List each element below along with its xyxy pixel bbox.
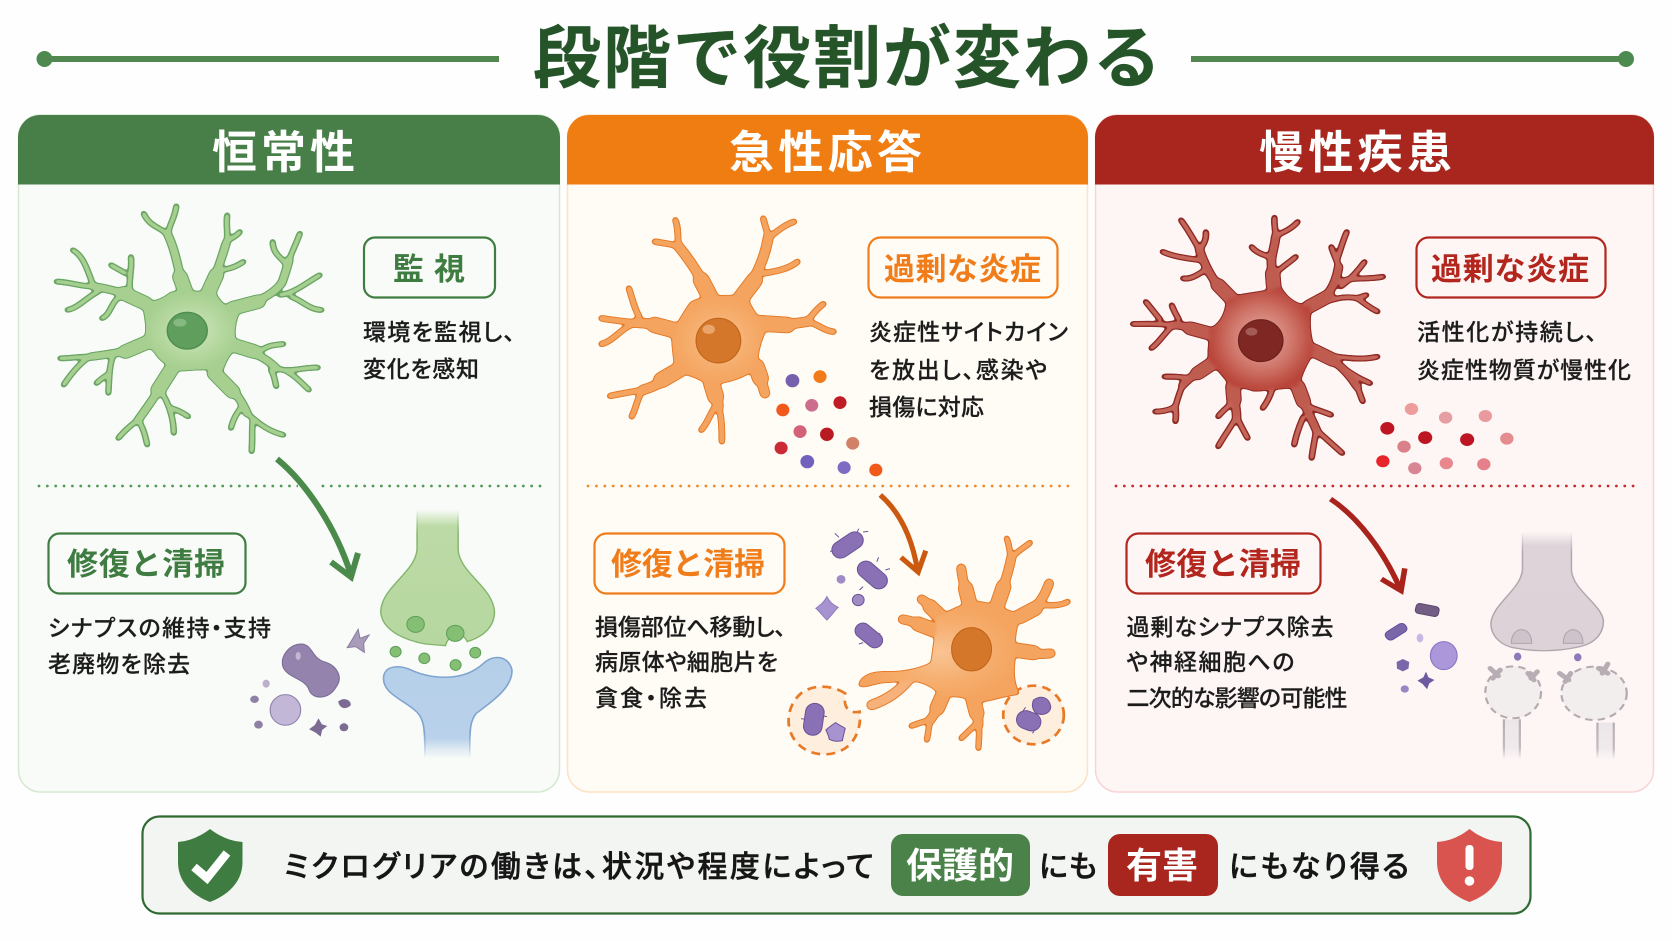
arrow bbox=[1331, 499, 1405, 591]
text: inflammation description: 炎症性サイトカイン bbox=[869, 319, 1068, 345]
text: にもなり得る: にもなり得る bbox=[1229, 851, 1409, 884]
panel: chronic disease bbox=[1095, 115, 1654, 792]
pill: 保護的 bbox=[891, 834, 1030, 896]
pathogens bbox=[816, 529, 891, 651]
title with side lines bbox=[36, 21, 1634, 97]
text: harm description bbox=[1126, 614, 1348, 711]
title text: 段階で役割が変わる bbox=[533, 21, 1161, 97]
panel: acute response bbox=[567, 115, 1088, 792]
text: phagocytosis description: 損傷部位へ移動し、 bbox=[595, 614, 786, 640]
text: inflammation description: 損傷に対応 bbox=[869, 394, 984, 420]
badge: 過剰な炎症: 過剰な炎症 bbox=[1431, 252, 1589, 287]
arrow bbox=[880, 495, 926, 572]
dashed postsynaptic spines bbox=[1485, 666, 1627, 720]
particles: cytokines bbox=[775, 370, 882, 476]
text: にも: にも bbox=[1039, 851, 1097, 884]
divider bbox=[588, 485, 1068, 487]
text: harm description: 二次的な影響の可能性 bbox=[1126, 685, 1348, 711]
engulfed bubble: left bbox=[789, 687, 860, 754]
panel header: 急性応答: 急性応答 bbox=[729, 127, 922, 178]
badge: 修復と清掃: 修復と清掃 bbox=[611, 547, 765, 582]
neuron body and arms bbox=[860, 538, 1068, 748]
text: harm description: 過剰なシナプス除去 bbox=[1126, 614, 1334, 640]
badge: 監視 bbox=[364, 238, 495, 298]
text: chronic description: 炎症性物質が慢性化 bbox=[1417, 357, 1631, 383]
pill: 有害: 有害 bbox=[1126, 845, 1198, 886]
badge: 修復と清掃 bbox=[594, 534, 784, 594]
pathogens inside bubbles bbox=[801, 697, 1051, 741]
neuron: activated orange microglia bbox=[601, 218, 834, 442]
text: inflammation description bbox=[869, 319, 1068, 420]
activated neuron phagocytosing bbox=[860, 538, 1068, 748]
text: inflammation description: を放出し、感染や bbox=[869, 357, 1047, 383]
badge: 修復と清掃 bbox=[1126, 534, 1320, 594]
engulfed bubble: right bbox=[1003, 686, 1064, 744]
badge: 修復と清掃 bbox=[48, 534, 246, 594]
summary text: ミクログリアの働きは、状況や程度によって bbox=[284, 851, 874, 884]
postsynaptic terminal bbox=[383, 658, 512, 758]
text: chronic description: 活性化が持続し、 bbox=[1417, 319, 1597, 345]
badge: 過剰な炎症 bbox=[868, 238, 1058, 298]
panel header: 慢性疾患 bbox=[1095, 115, 1654, 184]
debris bbox=[250, 629, 369, 737]
divider bbox=[1116, 485, 1634, 487]
text: monitoring description: 変化を感知 bbox=[363, 356, 479, 382]
neuron: resting green microglia bbox=[56, 206, 322, 452]
pill: 有害 bbox=[1108, 834, 1218, 896]
panel header: 恒常性 bbox=[18, 115, 560, 184]
text: monitoring description: 環境を監視し、 bbox=[363, 319, 515, 345]
illustration: damaged synapse bbox=[1331, 499, 1627, 759]
badge: 過剰な炎症 bbox=[1416, 238, 1606, 298]
summary bar bbox=[142, 816, 1530, 914]
badge: 過剰な炎症: 過剰な炎症 bbox=[884, 252, 1041, 287]
icon: protective shield bbox=[178, 829, 242, 902]
vesicles bbox=[390, 616, 481, 670]
debris bbox=[1384, 603, 1457, 693]
presynaptic terminal bbox=[381, 510, 494, 646]
text: repair description: シナプスの維持・支持 bbox=[48, 615, 271, 641]
panel header: 急性応答 bbox=[567, 115, 1088, 184]
presynaptic terminal faded bbox=[1491, 532, 1603, 651]
divider bbox=[39, 485, 541, 487]
illustration: synapse with debris bbox=[250, 510, 512, 758]
text: phagocytosis description: 病原体や細胞片を bbox=[595, 649, 778, 675]
text: repair description: 老廃物を除去 bbox=[48, 651, 190, 677]
text: chronic description bbox=[1417, 319, 1631, 383]
particles: inflammatory substances bbox=[1376, 403, 1514, 474]
panel header: 恒常性: 恒常性 bbox=[212, 127, 355, 178]
arrow: neuron to synapse bbox=[277, 459, 358, 577]
badge: 修復と清掃: 修復と清掃 bbox=[67, 547, 225, 582]
dendrite stems bbox=[1503, 719, 1615, 759]
text: monitoring description bbox=[363, 319, 515, 382]
icon: warning shield bbox=[1437, 829, 1502, 902]
panel: homeostasis bbox=[18, 115, 560, 792]
text: phagocytosis description: 貪食・除去 bbox=[595, 685, 707, 711]
illustration group in lower half bbox=[789, 495, 1068, 754]
badge: 監視: 監視 bbox=[393, 252, 465, 287]
divider gap behind arrow bbox=[298, 482, 316, 490]
panel header: 慢性疾患: 慢性疾患 bbox=[1259, 127, 1452, 178]
pill: 保護的: 保護的 bbox=[906, 845, 1014, 886]
text: repair description bbox=[48, 615, 271, 677]
neuron: chronic red microglia bbox=[1133, 217, 1383, 458]
text: phagocytosis description bbox=[595, 614, 786, 711]
text: harm description: や神経細胞への bbox=[1126, 649, 1294, 675]
badge: 修復と清掃: 修復と清掃 bbox=[1145, 547, 1301, 582]
